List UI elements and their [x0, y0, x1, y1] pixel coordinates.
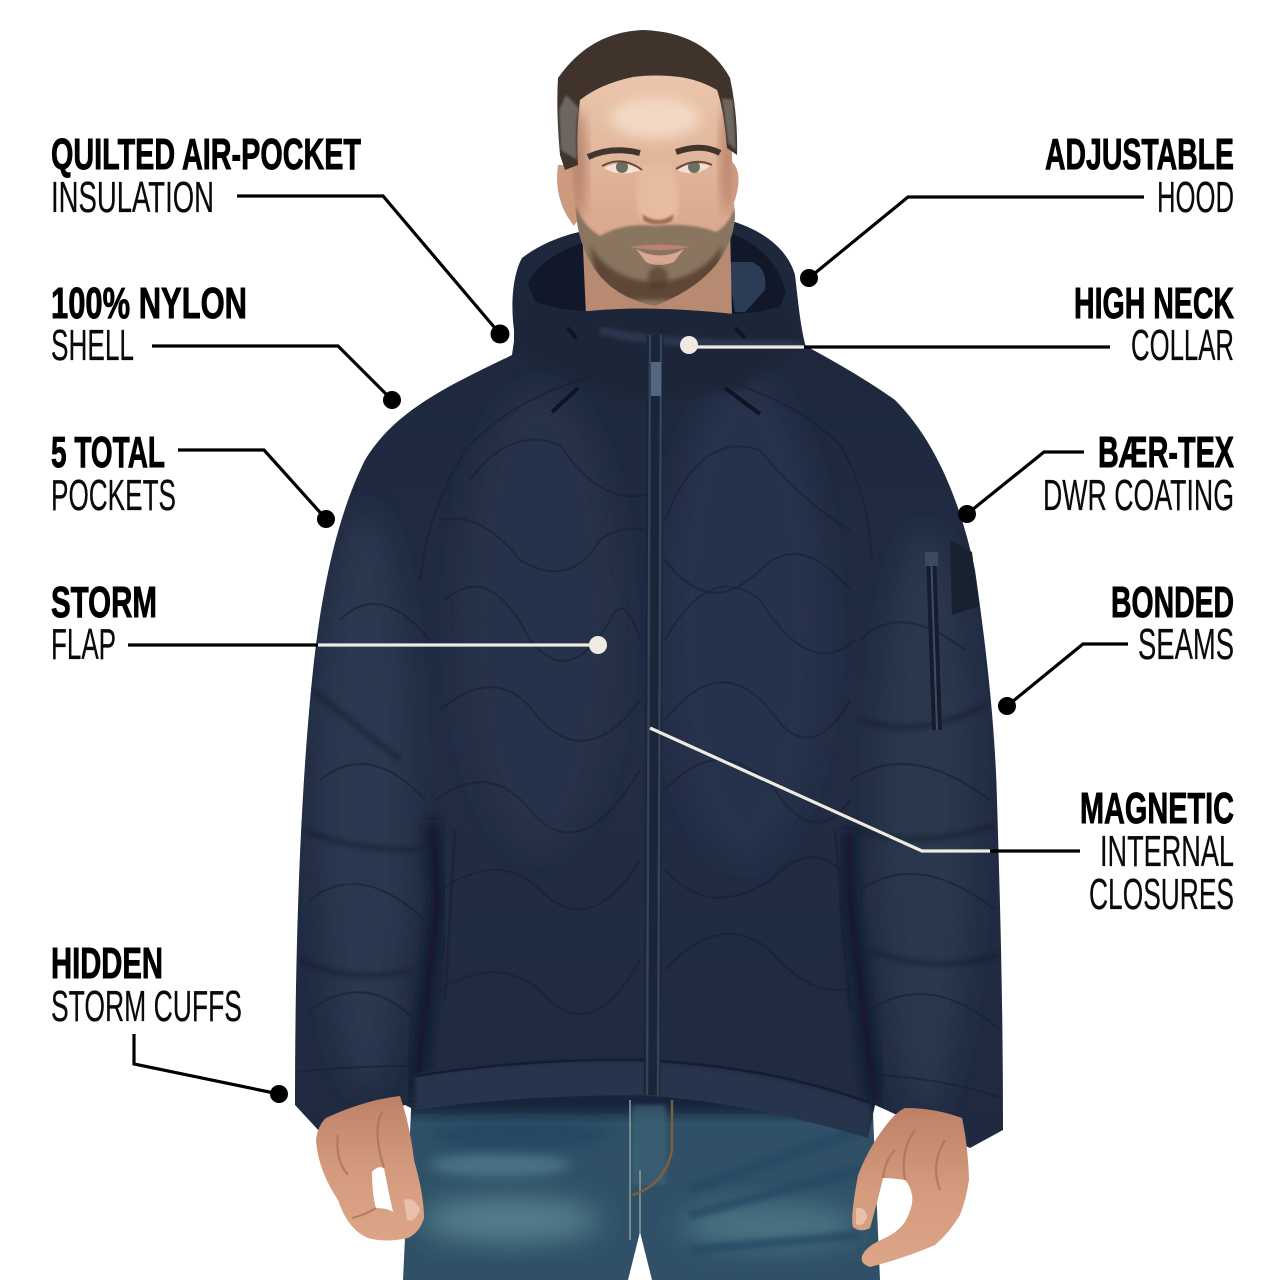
- mouth: [630, 244, 690, 250]
- callout: baer-tex DWR coating: [958, 428, 1234, 523]
- left hand: [316, 1096, 424, 1240]
- collar drawcords: [552, 328, 760, 414]
- sleeve wrinkles: [300, 690, 1000, 976]
- callout: 100% nylon shell: [51, 279, 401, 409]
- right hand: [852, 1108, 969, 1267]
- callout: quilted air-pocket insulation: QUILTED AIR-POCKET: [51, 130, 361, 179]
- hair: [557, 30, 737, 170]
- callout: adjustable hood: [800, 130, 1234, 287]
- eyes and brows: [588, 148, 720, 157]
- nose: [638, 170, 678, 220]
- callout: hidden storm cuffs: HIDDEN: [51, 939, 163, 988]
- callout: storm flap: [51, 578, 607, 669]
- sleeve zip pocket and patch: [925, 540, 979, 730]
- ears: [557, 160, 739, 226]
- raglan seams: [420, 378, 872, 580]
- hand pocket openings: [445, 830, 850, 1010]
- head: [557, 30, 740, 310]
- callout: 100% nylon shell: SHELL: [51, 321, 134, 370]
- callout: 5 total pockets: 5 TOTAL: [51, 428, 165, 477]
- callout: 5 total pockets: POCKETS: [51, 471, 176, 520]
- centre zipper: [647, 335, 661, 1095]
- callout: quilted air-pocket insulation: INSULATION: [51, 173, 214, 222]
- quilted stitching: [298, 440, 1002, 1098]
- jacket body and sleeves: [295, 296, 1003, 1148]
- photo: man wearing navy quilted jacket: [295, 30, 1003, 1280]
- callout: quilted air-pocket insulation: [51, 130, 510, 344]
- callout: magnetic internal closures: [650, 728, 1234, 919]
- callout: storm flap: STORM: [51, 578, 157, 627]
- neck: [582, 225, 732, 318]
- beard: [575, 206, 735, 306]
- callout: high neck collar: [680, 279, 1234, 370]
- callout: bonded seams: [998, 578, 1234, 715]
- callout: 100% nylon shell: 100% NYLON: [51, 279, 247, 328]
- callout: hidden storm cuffs: [51, 939, 288, 1103]
- face: [566, 68, 735, 306]
- jeans: [400, 1088, 890, 1280]
- callout: hidden storm cuffs: STORM CUFFS: [51, 982, 242, 1031]
- hood: [512, 222, 806, 348]
- callout: 5 total pockets: [51, 428, 335, 528]
- callout: storm flap: FLAP: [51, 620, 116, 669]
